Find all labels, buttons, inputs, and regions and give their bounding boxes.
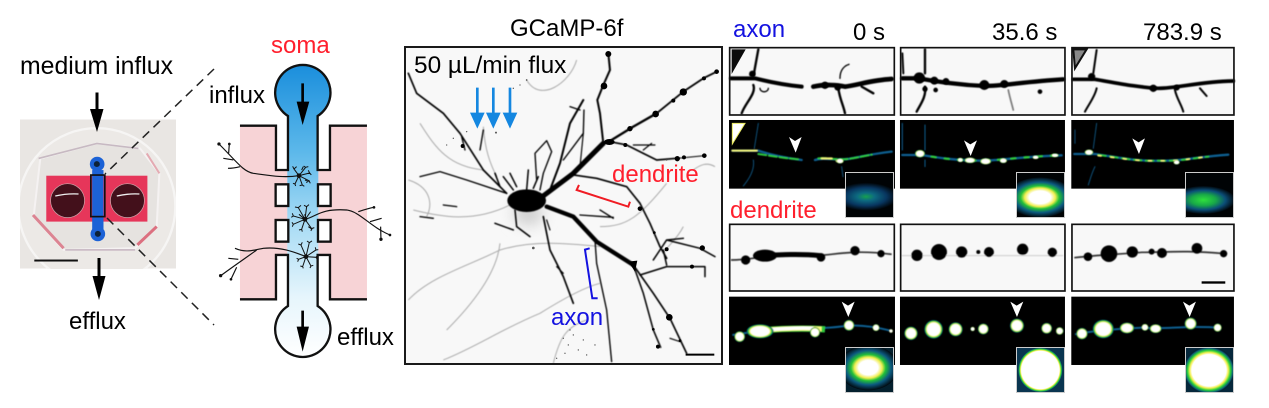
panel: dendrite greyscale row — [730, 224, 1234, 291]
panel: axon greyscale row — [730, 48, 1234, 115]
arrowheads — [789, 137, 1145, 156]
dendrites and axon — [408, 53, 717, 362]
photo: microfluidic device — [20, 120, 176, 269]
blue gradient channel — [275, 64, 330, 356]
label: dendrite row: dendrite — [730, 197, 817, 224]
label: soma: soma — [271, 32, 330, 59]
dendrite bracket — [577, 185, 630, 207]
time label 783.9 s: 783.9 s — [1143, 19, 1222, 46]
channel walls — [240, 65, 367, 357]
speckles — [446, 79, 667, 359]
insets: axon bouton — [834, 172, 1235, 218]
axon bracket — [585, 248, 598, 298]
label: axon on micrograph: axon — [551, 304, 603, 331]
title: GCaMP-6f: GCaMP-6f — [510, 15, 624, 42]
dashed zoom lines — [105, 69, 214, 325]
soma halo — [513, 202, 543, 225]
time label 0 s: 0 s — [853, 19, 885, 46]
scale bar — [1202, 281, 1225, 284]
micro-gap blocks — [276, 184, 331, 242]
flow arrows — [470, 88, 517, 129]
arrow: medium influx — [90, 92, 104, 132]
neuron arbors — [291, 166, 318, 268]
white gaps beside channel — [276, 125, 330, 300]
faint processes — [408, 60, 715, 363]
schematic: microfluidic channel — [217, 64, 391, 357]
label: influx: influx — [209, 82, 265, 109]
label: efflux left: efflux — [69, 308, 126, 335]
panel: neuron micrograph — [405, 47, 722, 364]
time label 35.6 s: 35.6 s — [992, 19, 1057, 46]
insets: dendrite bouton — [838, 345, 1235, 394]
device chip — [34, 143, 159, 250]
label: axon row: axon — [733, 16, 785, 43]
varicosities — [461, 51, 719, 349]
label: medium influx: medium influx — [20, 53, 174, 80]
label: efflux right: efflux — [337, 324, 394, 351]
scale bar — [686, 354, 714, 356]
arrowheads — [842, 302, 1196, 317]
panel: dendrite fluorescence row — [729, 297, 1234, 365]
arrow: efflux from device — [92, 258, 106, 300]
neurons — [220, 144, 390, 279]
schematic arrows — [297, 83, 309, 352]
pink culture region — [240, 125, 367, 300]
panel: axon fluorescence row — [729, 120, 1234, 189]
label: flux rate: 50 µL/min flux — [414, 52, 566, 79]
soma body — [507, 189, 546, 212]
label: dendrite on micrograph: dendrite — [612, 161, 699, 188]
